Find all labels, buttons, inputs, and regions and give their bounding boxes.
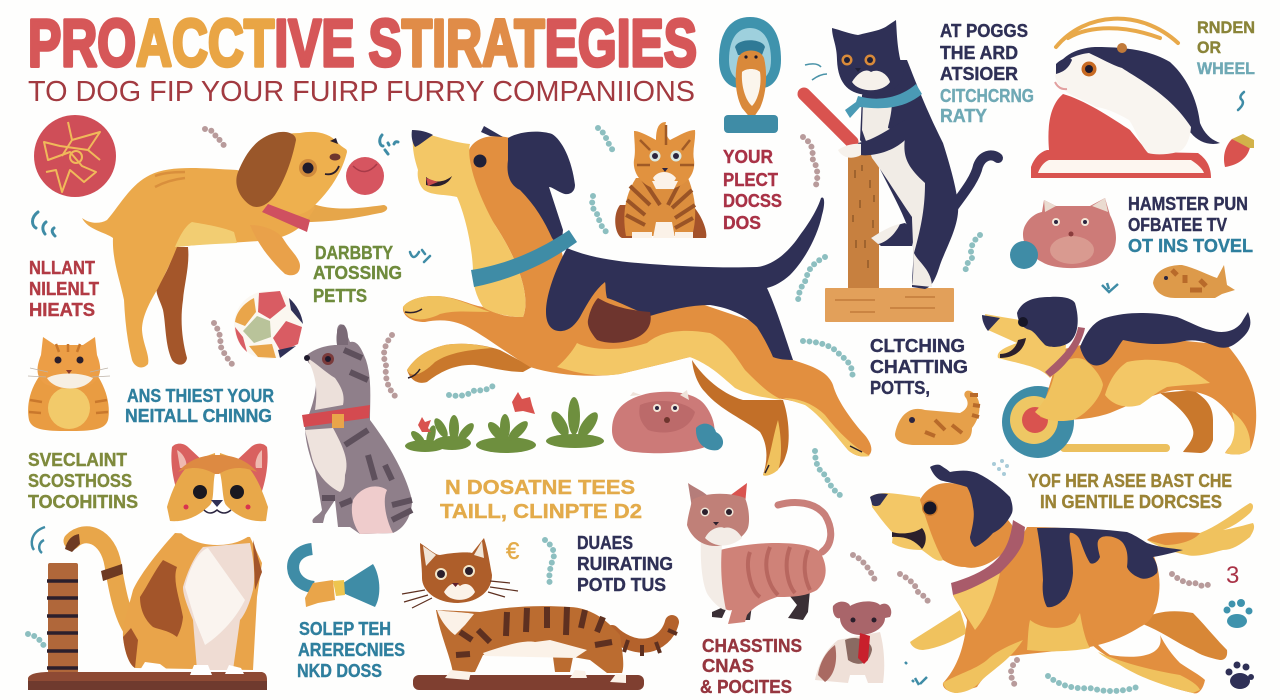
label: yof her: IN GENTILE DORCSES (1040, 492, 1222, 512)
icon: teal marks (410, 250, 430, 262)
fluffy tail (1147, 503, 1254, 556)
tail (612, 622, 672, 646)
illustration: small striped hamster (895, 391, 980, 445)
icon: teal arcs (32, 527, 45, 553)
label: duaes: DUAES (577, 533, 633, 553)
illustration: teal toy frame with hamster (719, 17, 781, 133)
far hind leg (1140, 611, 1227, 660)
front leg (1035, 358, 1103, 421)
illustration: small orange cat (28, 337, 110, 431)
ear (930, 465, 1013, 547)
yellow muzzle and chest (413, 130, 525, 317)
illustration: tabby cat walking (402, 538, 677, 690)
base (413, 675, 644, 690)
toe marks (405, 309, 862, 473)
label: hamster pun: OT INS TOVEL (1128, 236, 1253, 256)
far front leg (407, 344, 532, 383)
label: at poggs: ATSIOER (940, 64, 1018, 84)
icon: teal tick (1238, 92, 1244, 110)
red stand (1031, 150, 1211, 178)
illustration: pink hamster with teal ball (1010, 198, 1116, 269)
label: yof her: YOF HER ASEE BAST CHE (1028, 471, 1232, 491)
label: your plect (723, 147, 782, 233)
illustration: small brown hamster (1153, 265, 1235, 298)
body (436, 606, 623, 673)
label: solep teh: SOLEP TEH (299, 619, 391, 639)
ear (236, 132, 296, 207)
icon: multicolour football (234, 291, 303, 359)
collar (845, 84, 922, 118)
ear and head navy (1017, 297, 1078, 347)
paw yellow (403, 296, 490, 319)
stripes (456, 607, 612, 655)
illustration: large orange dog (870, 465, 1254, 693)
label: at poggs: CITCHCRNG (940, 86, 1034, 106)
ears (688, 483, 710, 508)
icon: strawberry (1224, 134, 1254, 167)
illustration: calico cat on post (28, 444, 268, 690)
illustration: grey cat sitting (302, 324, 412, 534)
label: your plect: DOCSS (723, 191, 782, 211)
label: left red: HIEATS (29, 300, 95, 320)
label: green darbbty: ATOSSING (313, 263, 402, 283)
hamster body (1056, 47, 1220, 144)
label: yellow centre: € (506, 538, 520, 565)
collar (1045, 327, 1085, 377)
label: olive left: SVECLAINT (28, 450, 127, 470)
belly patch (175, 222, 237, 247)
belly (1027, 613, 1090, 651)
collar (302, 405, 370, 427)
illustration: yellow dog playing with ball (82, 132, 387, 367)
far hind leg (157, 247, 188, 365)
label: at poggs: THE ARD (940, 43, 1018, 63)
far fore leg (910, 610, 967, 650)
label: olive left: TOCOHITINS (28, 492, 138, 512)
label: clatching (870, 336, 968, 398)
label: rnden or wheel: OR (1197, 38, 1221, 57)
head (252, 132, 347, 215)
label: chasstins: CHASSTINS (702, 636, 802, 656)
label: left red (29, 258, 99, 320)
illustration: pink cat blob (612, 390, 723, 453)
white chest and belly (437, 610, 474, 635)
label: teal mid-left: ANS THIEST YOUR (127, 386, 274, 406)
icon: number three: 3 (1226, 562, 1239, 589)
label: green darbbty (313, 243, 402, 306)
label: green darbbty: PETTS (313, 286, 367, 306)
label: at poggs (940, 21, 1034, 126)
tail (778, 502, 831, 552)
wheel (1002, 386, 1074, 458)
navy saddle and tail (546, 197, 824, 360)
body (1040, 335, 1256, 455)
label: your plect: PLECT (723, 170, 778, 190)
icon: small marks (905, 662, 927, 685)
hind far leg (1160, 390, 1213, 453)
head (634, 122, 695, 190)
collar (951, 520, 1025, 595)
label: duaes (577, 533, 673, 595)
label: rnden or wheel: RNDEN (1197, 18, 1255, 37)
icon: teal check (1102, 283, 1118, 292)
hind foot (871, 223, 914, 246)
mouth (426, 176, 452, 186)
hind leg yellow (783, 398, 870, 457)
illustration: navy cat climbing post (832, 20, 998, 289)
ears (171, 444, 204, 494)
icon: teal arcs (32, 212, 55, 236)
label: solep teh (297, 619, 405, 681)
body (718, 543, 826, 624)
label: hamster pun: OFBATEE TV (1128, 215, 1227, 235)
label: chasstins (700, 636, 802, 697)
body (860, 60, 958, 289)
head (420, 538, 492, 603)
label: clatching: POTTS, (870, 378, 930, 398)
face details (299, 159, 317, 177)
label: duaes: RUIRATING (577, 554, 673, 574)
subtitle: TO DOG FIP YOUR FUIRP FURRY COMPANIIONS (28, 76, 695, 108)
label: yellow centre: N DOSATNE TEES (445, 477, 635, 499)
label: solep teh: NKD DOSS (297, 661, 382, 681)
muzzle and face (985, 314, 1066, 378)
title: PROACCTIVE STIRATEGIES (28, 6, 697, 81)
label: at poggs: AT POGGS (940, 21, 1028, 41)
body (123, 533, 262, 670)
icon: bow toy (293, 549, 379, 607)
illustration: puppy with red toy (815, 601, 891, 683)
icon: light blue dots (992, 459, 1009, 476)
body (624, 178, 695, 236)
icon: navy paw (1226, 662, 1254, 689)
nose (412, 130, 433, 147)
label: hamster pun: HAMSTER PUN (1128, 194, 1248, 214)
body (82, 168, 315, 367)
second front leg (250, 225, 300, 275)
belly (1105, 360, 1210, 407)
label: green darbbty: DARBBTY (315, 243, 393, 263)
far legs (712, 590, 810, 620)
snout and face (871, 493, 943, 561)
near fore paw (943, 640, 1023, 693)
label: duaes: POTD TUS (577, 575, 666, 595)
post (48, 563, 78, 673)
white chest (862, 100, 932, 287)
far hind leg (692, 360, 789, 475)
head orange (920, 483, 1013, 568)
white face and chest (307, 358, 344, 410)
label: left red: NLLANT (29, 258, 95, 278)
stripes (322, 350, 412, 520)
body (305, 324, 412, 534)
title (28, 6, 697, 108)
tail (950, 155, 998, 212)
illustration: tabby cat (615, 122, 706, 238)
illustration: scratching post (804, 64, 954, 322)
label: olive left: SCOSTHOSS (28, 471, 132, 491)
illustration: hamster on red wheel (1031, 19, 1220, 178)
belly yellow (557, 331, 783, 400)
hind near leg (1082, 613, 1205, 693)
label: chasstins: & POCITES (700, 677, 792, 697)
label: teal mid-left (125, 386, 274, 426)
wheel bar (1060, 444, 1170, 452)
label: your plect: DOS (723, 213, 761, 233)
ear (337, 325, 348, 345)
navy markings (1037, 528, 1183, 607)
body orange (403, 136, 871, 457)
label: olive left (28, 450, 138, 512)
icon: red ball with yellow pattern (34, 115, 116, 197)
illustration: large running dog (403, 126, 871, 476)
collar (262, 204, 310, 232)
face (172, 457, 261, 545)
illustration: pink cat (687, 483, 831, 624)
tail (72, 535, 132, 630)
white chest (701, 540, 726, 610)
label: teal mid-left: NEITALL CHINNG (125, 406, 272, 426)
rear paw shadow (615, 205, 706, 238)
collar (471, 230, 577, 287)
body (943, 527, 1160, 693)
label: chasstins: CNAS (702, 656, 754, 676)
head (832, 20, 903, 95)
label: clatching: CHATTING (870, 357, 968, 377)
label: yof her (1028, 471, 1232, 512)
label: left red: NILENLT (29, 279, 99, 299)
label: clatching: CLTCHING (870, 336, 965, 356)
eye (474, 154, 486, 168)
outstretched front leg (306, 203, 387, 222)
motion arcs (1056, 19, 1178, 47)
paws (445, 670, 626, 683)
label: at poggs: RATY (940, 106, 987, 126)
arm (858, 120, 905, 155)
ear and neck (508, 132, 575, 250)
decorative squiggles (28, 128, 1210, 691)
label: yellow centre: TAILL, CLINPTE D2 (440, 501, 642, 523)
label: solep teh: ARERECNIES (298, 640, 405, 660)
chest yellow (953, 573, 1000, 630)
label: hamster pun (1128, 194, 1253, 256)
label: your plect: YOUR (723, 147, 773, 167)
icon: teal paw (1224, 599, 1252, 628)
head (687, 494, 749, 546)
label: yellow centre (440, 477, 642, 565)
label: rnden or wheel: WHEEL (1197, 59, 1255, 78)
icon: plants (405, 392, 604, 453)
navy saddle (1080, 312, 1250, 366)
icon: red ball (346, 135, 398, 195)
label: rnden or wheel (1197, 18, 1255, 78)
illustration: dog with wheel (982, 297, 1256, 458)
brown patch (588, 298, 651, 343)
pink tail (352, 486, 393, 534)
base (28, 672, 267, 690)
